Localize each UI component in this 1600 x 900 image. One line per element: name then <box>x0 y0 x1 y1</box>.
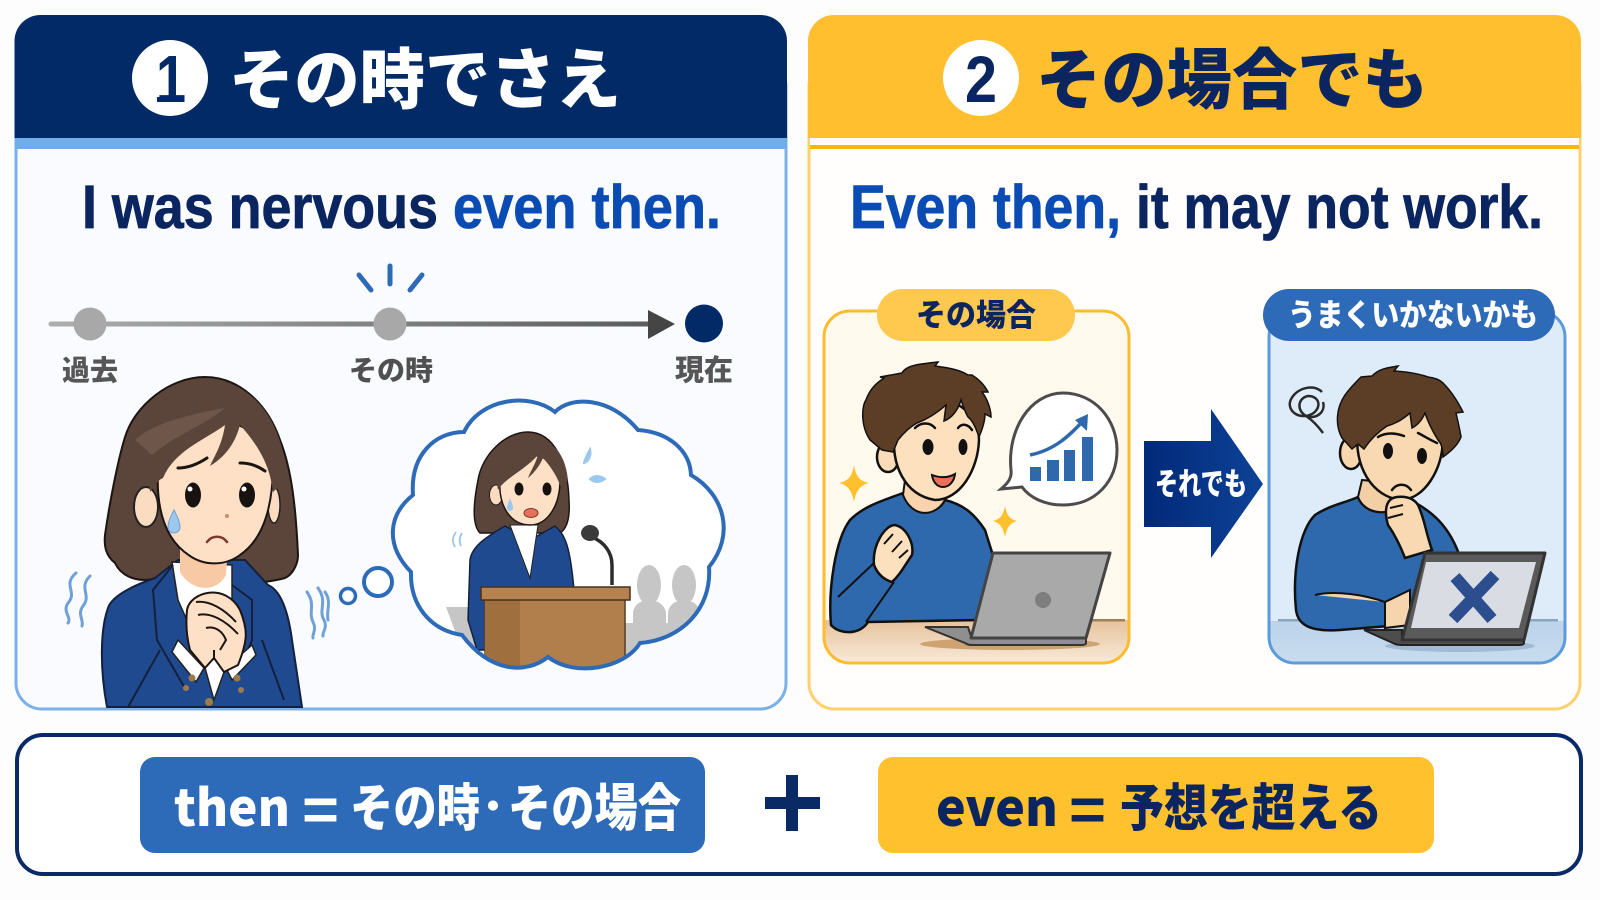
dot: past <box>74 308 106 340</box>
label: past: 過去 <box>62 349 118 389</box>
audience silhouettes <box>446 565 700 660</box>
scene card: failure <box>1269 311 1565 663</box>
buttons <box>183 674 244 706</box>
panel: その場合でも <box>808 15 1581 709</box>
ear <box>134 487 158 527</box>
sentence 1: even then. <box>453 173 721 241</box>
face <box>158 420 273 563</box>
pill: うまくいかないかも: うまくいかないかも <box>1288 290 1538 335</box>
sparkles <box>839 465 869 502</box>
mini ear <box>490 485 502 505</box>
mini face <box>500 455 560 525</box>
man: mouth <box>1392 485 1411 490</box>
arm lines <box>838 563 894 622</box>
dot: then <box>374 308 406 340</box>
desk <box>1269 619 1565 663</box>
man: hair <box>863 362 991 452</box>
illustration: nervous girl <box>102 377 302 707</box>
man: hair <box>1337 366 1463 457</box>
sentence 1 <box>82 173 721 241</box>
sentence 2: Even then, <box>850 173 1121 241</box>
man: mouth <box>932 474 955 487</box>
number badge 1 <box>132 40 208 117</box>
shaking marks <box>66 573 329 638</box>
laptop <box>1364 553 1545 645</box>
lapels <box>128 565 284 707</box>
man: ear <box>1340 437 1362 469</box>
header accent strip <box>14 138 787 149</box>
pill: then definition: その場合 <box>508 767 681 841</box>
microphone <box>592 537 612 585</box>
shirt and neck <box>172 562 232 700</box>
number badge 2: 2 <box>965 42 997 116</box>
jacket <box>102 560 302 707</box>
man: fist <box>874 525 912 582</box>
emphasis rays <box>359 266 422 290</box>
pill: then definition: その時 <box>350 767 480 841</box>
thought dots <box>340 568 392 604</box>
pill: then definition: ・ <box>475 778 511 830</box>
number badge 2 <box>943 40 1019 116</box>
cuffs <box>172 640 256 682</box>
sentence 2 <box>850 173 1543 241</box>
nose and mouth <box>225 514 229 518</box>
panel header <box>14 15 787 138</box>
pill: then definition: = <box>302 776 339 843</box>
label: then: その時 <box>349 349 433 389</box>
pill: その場合 <box>877 289 1075 341</box>
label: now: 現在 <box>675 347 733 389</box>
pill: even definition <box>878 757 1434 853</box>
cloud outline <box>393 401 724 668</box>
pill: その場合: その場合 <box>916 290 1036 335</box>
man: ear <box>877 442 899 472</box>
card border <box>1269 311 1565 663</box>
panel body <box>16 60 786 709</box>
tear <box>168 510 180 533</box>
thought cloud <box>393 401 724 674</box>
header gap <box>810 138 1579 145</box>
summary bar <box>17 735 1581 874</box>
sentence 1: I was nervous <box>82 173 438 241</box>
man: eyes and brows <box>1383 443 1393 459</box>
panel header <box>808 15 1581 138</box>
heading 2: その場合でも <box>1036 27 1428 123</box>
man: eyes and brows <box>922 439 934 455</box>
laptop <box>925 553 1110 645</box>
brows <box>178 458 265 471</box>
dizzy swirl <box>1290 387 1324 433</box>
eyes <box>185 482 201 508</box>
mini hair <box>474 432 569 533</box>
hair highlight <box>135 408 225 455</box>
pill: even definition: even <box>936 767 1058 841</box>
desk <box>824 619 1129 663</box>
arrow: それでも: それでも <box>1155 459 1247 504</box>
man: hand on chin <box>1386 497 1432 558</box>
scene card: success <box>824 311 1129 663</box>
man: face <box>1357 402 1443 500</box>
timeline arrow head <box>648 310 675 339</box>
speech scene <box>446 432 700 674</box>
hair back <box>105 377 298 585</box>
pill: then definition <box>140 757 705 853</box>
sentence 2: it may not work. <box>1136 173 1543 241</box>
man: face <box>894 399 979 500</box>
heading 1: その時でさえ <box>229 27 621 123</box>
plus sign <box>765 775 820 831</box>
number badge 1: 1 <box>156 42 186 117</box>
header accent line <box>810 145 1579 149</box>
timeline <box>51 266 733 389</box>
man: sweater <box>1295 497 1461 630</box>
man: sweater <box>830 493 996 632</box>
mini jacket <box>468 526 574 650</box>
failure mark <box>1453 575 1495 619</box>
pill: even definition: 予想を超える <box>1120 767 1382 841</box>
panel: その時でさえ <box>14 15 787 709</box>
bangs <box>150 379 286 492</box>
card border <box>824 311 1129 663</box>
dot: now <box>685 304 723 342</box>
pill: then definition: then <box>174 767 290 841</box>
podium <box>484 600 626 666</box>
pill: even definition: = <box>1069 776 1106 843</box>
speech bubble chart <box>1001 393 1117 505</box>
man: neck <box>903 480 945 513</box>
man: neck <box>1358 480 1410 512</box>
clasped hands <box>186 593 246 672</box>
panel body <box>809 60 1580 709</box>
arrow: それでも <box>1144 409 1263 558</box>
